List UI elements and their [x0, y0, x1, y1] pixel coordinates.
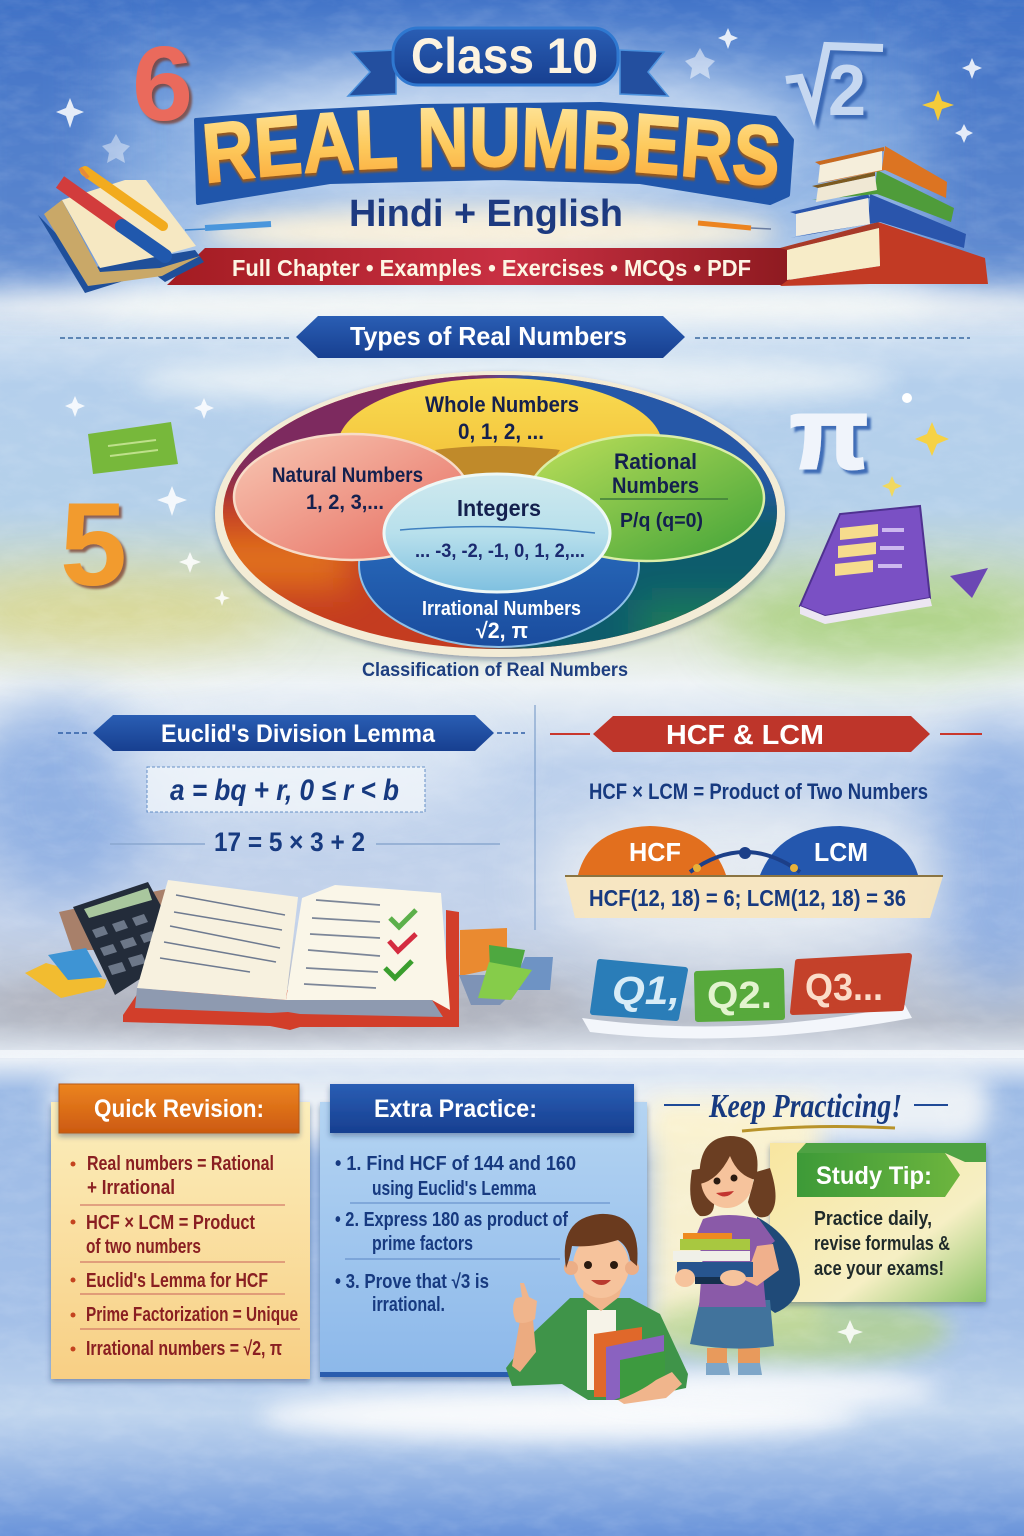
natural numbers: Natural Numbers [272, 464, 423, 487]
revision list: Euclid's Lemma for HCF [86, 1270, 268, 1292]
illustration: girl [673, 1136, 800, 1375]
revision list: Irrational numbers = √2, π [86, 1338, 282, 1360]
header: Study Tip [797, 1153, 960, 1197]
venn diagram [212, 370, 788, 664]
tile Q1: Q1, [612, 969, 680, 1013]
panel: Quick Revision [51, 1084, 310, 1379]
gold star [922, 90, 954, 121]
square root 2 decoration: 2 [828, 51, 866, 131]
heading: HCF & LCM: HCF & LCM [666, 719, 824, 750]
main title: REAL NUMBERS [204, 107, 780, 190]
practice list: • 3. Prove that √3 is [335, 1271, 489, 1293]
revision list: Prime Factorization = Unique [86, 1304, 298, 1326]
illustration: boy [506, 1214, 688, 1404]
red ribbon banner [167, 248, 790, 285]
irrational numbers [359, 483, 639, 647]
practice list: using Euclid's Lemma [372, 1178, 537, 1200]
icon: purple book [800, 506, 932, 624]
whole numbers [338, 378, 662, 512]
section heading: Types of Real Numbers [60, 316, 970, 358]
revision list: HCF × LCM = Product [86, 1212, 255, 1234]
revision list: of two numbers [86, 1236, 201, 1258]
irrational numbers: √2, π [476, 618, 528, 643]
number 6 decoration: 6 [132, 25, 193, 143]
tip text [814, 1208, 950, 1280]
icon: tabs and folders [459, 928, 553, 1005]
orange book [815, 146, 947, 198]
red book [780, 222, 988, 286]
tip text: Practice daily, [814, 1208, 932, 1230]
icon: stack of books [780, 146, 988, 286]
number 5 decoration: 5 [60, 479, 127, 611]
practice list: prime factors [372, 1233, 473, 1255]
venn caption: Classification of Real Numbers [362, 660, 628, 681]
tile Q2: Q2. [707, 975, 772, 1017]
natural numbers: 1, 2, 3,... [306, 491, 384, 514]
pencil accents [185, 223, 771, 230]
formula: HCF × LCM: HCF × LCM = Product of Two Numbers [589, 779, 928, 804]
formula box [147, 767, 425, 812]
HCF LCM arcs: LCM [814, 837, 868, 867]
section heading: Types of Real Numbers: Types of Real Numbers [350, 321, 627, 351]
example formula: 17 = 5 × 3 + 2 [214, 827, 365, 857]
integers [384, 474, 610, 592]
tile Q1 [593, 962, 685, 1018]
formula box: a = bq + r, 0 ≤ r < b [170, 774, 399, 807]
revision list: Real numbers = Rational [87, 1153, 274, 1175]
rational numbers: Numbers [612, 473, 699, 498]
panel: Extra Practice [320, 1084, 647, 1377]
header: Study Tip: Study Tip: [816, 1162, 932, 1190]
HCF LCM arcs: HCF [629, 837, 681, 867]
rational numbers: P/q (q=0) [620, 510, 703, 532]
header: Quick Revision: Quick Revision: [94, 1095, 264, 1123]
tip text: ace your exams! [814, 1258, 944, 1280]
header: Quick Revision [59, 1084, 299, 1133]
revision list [70, 1153, 300, 1360]
tip text: revise formulas & [814, 1233, 950, 1255]
heading: HCF & LCM [550, 716, 982, 752]
tile Q3: Q3... [805, 967, 883, 1009]
tile Q3 [793, 956, 909, 1012]
natural numbers [234, 434, 470, 560]
blue book [790, 194, 966, 248]
icon: green note [88, 422, 178, 474]
header: Extra Practice: Extra Practice: [374, 1095, 537, 1123]
panel: Study Tip [770, 1143, 986, 1302]
heading: Euclid's Division Lemma [58, 715, 525, 751]
outer ellipse [212, 370, 788, 664]
tile Q2 [697, 971, 782, 1019]
pi symbol decoration: π [790, 378, 868, 490]
icon: open book with pencils [38, 168, 204, 293]
red ribbon banner: Full Chapter • Examples • Exercises • MCQs • PDF [232, 255, 751, 281]
title ribbon: Class 10: Class 10 [411, 28, 598, 84]
revision list: + Irrational [87, 1177, 175, 1199]
integers: Integers [457, 495, 541, 521]
stars right [882, 393, 949, 497]
icon: calculator and sticky notes [25, 882, 190, 998]
practice list: • 1. Find HCF of 144 and 160 [335, 1153, 576, 1175]
rational numbers: Rational [614, 449, 697, 474]
green book [812, 170, 954, 222]
header: Extra Practice [330, 1084, 634, 1133]
practice list [335, 1153, 610, 1316]
practice list: irrational. [372, 1294, 445, 1316]
heading: Keep Practicing: Keep Practicing! [708, 1088, 902, 1125]
practice list: • 2. Express 180 as product of [335, 1209, 568, 1231]
HCF LCM result bar [565, 876, 943, 918]
whole numbers: Whole Numbers [425, 392, 579, 417]
whole numbers: 0, 1, 2, ... [458, 419, 544, 444]
irrational numbers: Irrational Numbers [422, 598, 581, 620]
icon: purple triangle [950, 568, 988, 598]
icon: open book with checks [123, 880, 459, 1030]
HCF LCM arcs [578, 826, 918, 875]
quiz tiles [582, 956, 912, 1038]
heading: Euclid's Division Lemma: Euclid's Division Lemma [161, 720, 436, 748]
title ribbon: Class 10 [348, 28, 668, 96]
vertical divider [534, 705, 536, 930]
subtitle: Hindi + English [349, 193, 623, 235]
integers: ... -3, -2, -1, 0, 1, 2,... [415, 541, 585, 562]
square root 2 decoration [786, 46, 883, 131]
HCF LCM result bar: HCF(12, 18) = 6; LCM(12, 18) = 36 [589, 885, 906, 911]
rational numbers [528, 435, 764, 561]
